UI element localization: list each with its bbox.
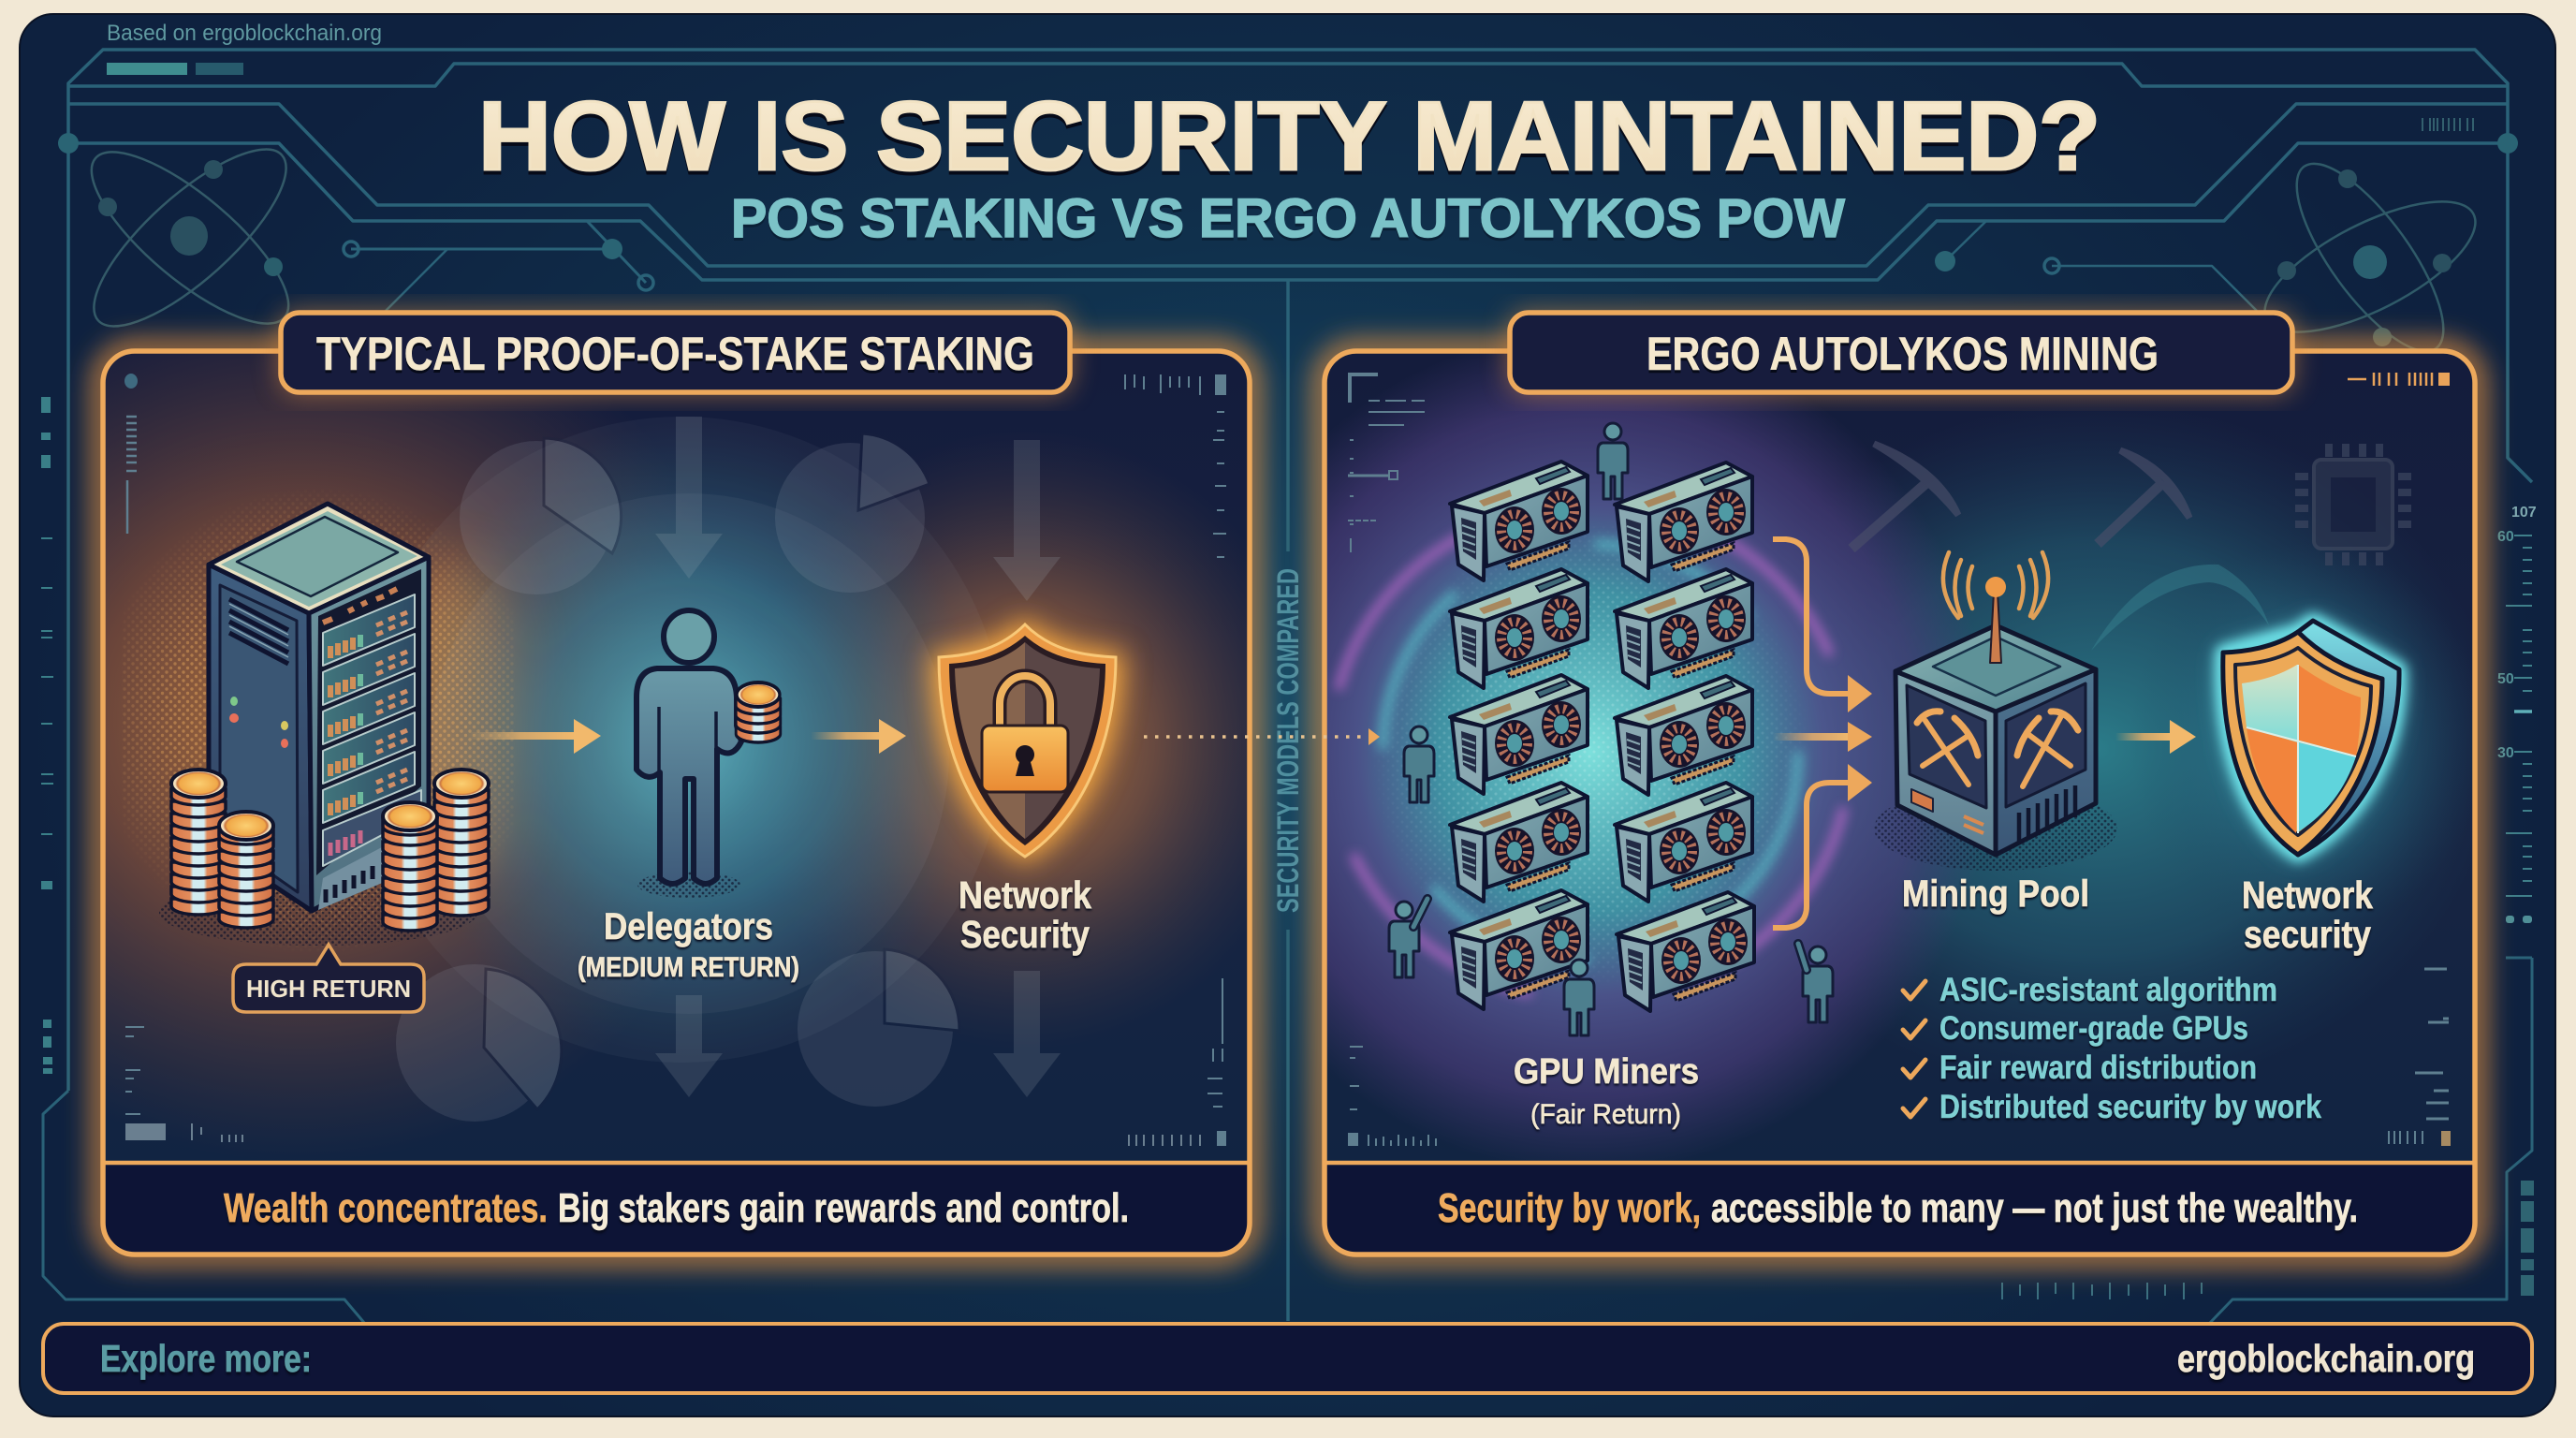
faint chip bbox=[2295, 444, 2411, 565]
caption divider bbox=[103, 1161, 1250, 1165]
top-right tick label bbox=[2422, 118, 2473, 131]
caption: wealth concentrates: Big stakers gain rewards and control. bbox=[558, 1185, 1129, 1231]
icon: small miners bbox=[1389, 423, 1833, 1035]
checklist: Consumer-grade GPUs bbox=[1939, 1010, 2248, 1047]
subtitle: POS STAKING VS ERGO AUTOLYKOS POW bbox=[731, 188, 1845, 249]
panel: proof-of-stake bbox=[0, 281, 1315, 1255]
callout: high return bbox=[233, 945, 424, 1012]
circuit nodes bbox=[58, 133, 2518, 271]
right edge gauge: 60 bbox=[2497, 529, 2514, 545]
tab: proof-of-stake heading bbox=[279, 311, 1072, 394]
icon: crossed pickaxes left bbox=[1917, 712, 1978, 785]
source note: Based on ergoblockchain.org bbox=[107, 21, 382, 46]
HUD details bbox=[1348, 373, 2451, 1146]
footer bar bbox=[43, 1324, 2532, 1393]
panel background bbox=[1327, 354, 2473, 1253]
HUD details bbox=[124, 374, 1226, 1146]
label: network security: Security bbox=[960, 913, 1090, 956]
label: delegators bbox=[578, 906, 799, 983]
icon: right atom bbox=[2247, 143, 2493, 372]
label: network security bbox=[959, 873, 1091, 956]
label: delegators: Delegators bbox=[604, 906, 773, 947]
callout: high return: HIGH RETURN bbox=[246, 975, 411, 1003]
icon: check marks bbox=[1903, 981, 1925, 1117]
bottom tick ruler bbox=[2002, 1283, 2202, 1299]
arrow: server to delegators bbox=[467, 719, 601, 754]
arrow: pool to security bbox=[2115, 720, 2196, 754]
faint pie charts bbox=[396, 433, 959, 1122]
coin stack 2 bbox=[219, 812, 273, 928]
tab: ergo mining heading: ERGO AUTOLYKOS MINING bbox=[1647, 328, 2159, 380]
label: delegators: (MEDIUM RETURN) bbox=[578, 952, 799, 983]
label: network security bbox=[2242, 873, 2373, 956]
panel: ergo mining bbox=[1188, 330, 2499, 1255]
label: network security: Network bbox=[959, 873, 1091, 917]
label: network security: Network bbox=[2242, 873, 2373, 917]
icon: left atom bbox=[68, 124, 312, 352]
coin stack 1 bbox=[171, 770, 226, 915]
checklist: Fair reward distribution bbox=[1939, 1049, 2257, 1086]
icon: delegator coins bbox=[736, 682, 781, 742]
panel border bbox=[1325, 351, 2475, 1255]
GPU miner cards bbox=[1450, 462, 1754, 1011]
arrows: GPUs to mining pool bbox=[1773, 539, 1872, 928]
faint downward arrows bbox=[655, 417, 1061, 1097]
checklist: Distributed security by work bbox=[1939, 1089, 2321, 1125]
header status bars bbox=[107, 63, 243, 75]
footer label: Explore more: bbox=[100, 1337, 312, 1380]
label: gpu miners: GPU Miners bbox=[1514, 1052, 1699, 1092]
icon: antenna bbox=[1943, 552, 2048, 663]
faint swoosh bbox=[2091, 565, 2269, 651]
icon: coin stacks bbox=[171, 770, 489, 931]
left edge ticks bbox=[41, 397, 53, 1074]
panel background bbox=[105, 354, 1247, 1253]
divider label: SECURITY MODELS COMPARED bbox=[1271, 568, 1305, 913]
caption: security by work: Security by work, bbox=[1438, 1185, 1701, 1231]
panel glow bbox=[1325, 351, 2475, 1255]
tab: ergo mining heading bbox=[1508, 311, 2294, 394]
label: network security: security bbox=[2244, 913, 2371, 956]
caption: security by work: accessible to many — not just the wealthy. bbox=[1711, 1185, 2358, 1231]
arrow: delegators to security bbox=[811, 719, 906, 754]
right edge gauge: 50 bbox=[2497, 671, 2514, 687]
coin stack 4 bbox=[434, 770, 489, 916]
checklist bbox=[1903, 972, 2321, 1125]
label: mining pool: Mining Pool bbox=[1902, 873, 2089, 915]
energy rings bbox=[1330, 504, 1851, 1000]
title: HOW IS SECURITY MAINTAINED? bbox=[478, 82, 2100, 191]
icon: server rack bbox=[159, 504, 477, 946]
caption divider bbox=[1325, 1161, 2475, 1165]
icon: crossed pickaxes right bbox=[2017, 712, 2078, 786]
panel border bbox=[103, 351, 1250, 1255]
icon: delegator person bbox=[637, 610, 781, 898]
faint pickaxes bbox=[1852, 444, 2189, 549]
panel glow bbox=[103, 351, 1250, 1255]
coin stack 3 bbox=[383, 802, 437, 931]
tab: proof-of-stake heading: TYPICAL PROOF-OF-STAKE STAKING bbox=[316, 328, 1034, 380]
right edge gauge: 107 bbox=[2511, 505, 2537, 521]
right edge gauge bbox=[2497, 505, 2537, 1296]
icon: mining pool box bbox=[1874, 552, 2117, 871]
icon: network security shield bbox=[931, 618, 1123, 863]
caption: wealth concentrates: Wealth concentrates. bbox=[224, 1185, 548, 1231]
arrow: dotted comparison link bbox=[1144, 728, 1380, 745]
footer link: ergoblockchain.org bbox=[2177, 1337, 2475, 1380]
label: gpu miners: (Fair Return) bbox=[1530, 1099, 1681, 1130]
checklist: ASIC-resistant algorithm bbox=[1939, 972, 2277, 1008]
right edge gauge: 30 bbox=[2497, 745, 2514, 761]
label: gpu miners bbox=[1514, 1052, 1699, 1130]
icon: colored shield bbox=[2223, 621, 2399, 855]
